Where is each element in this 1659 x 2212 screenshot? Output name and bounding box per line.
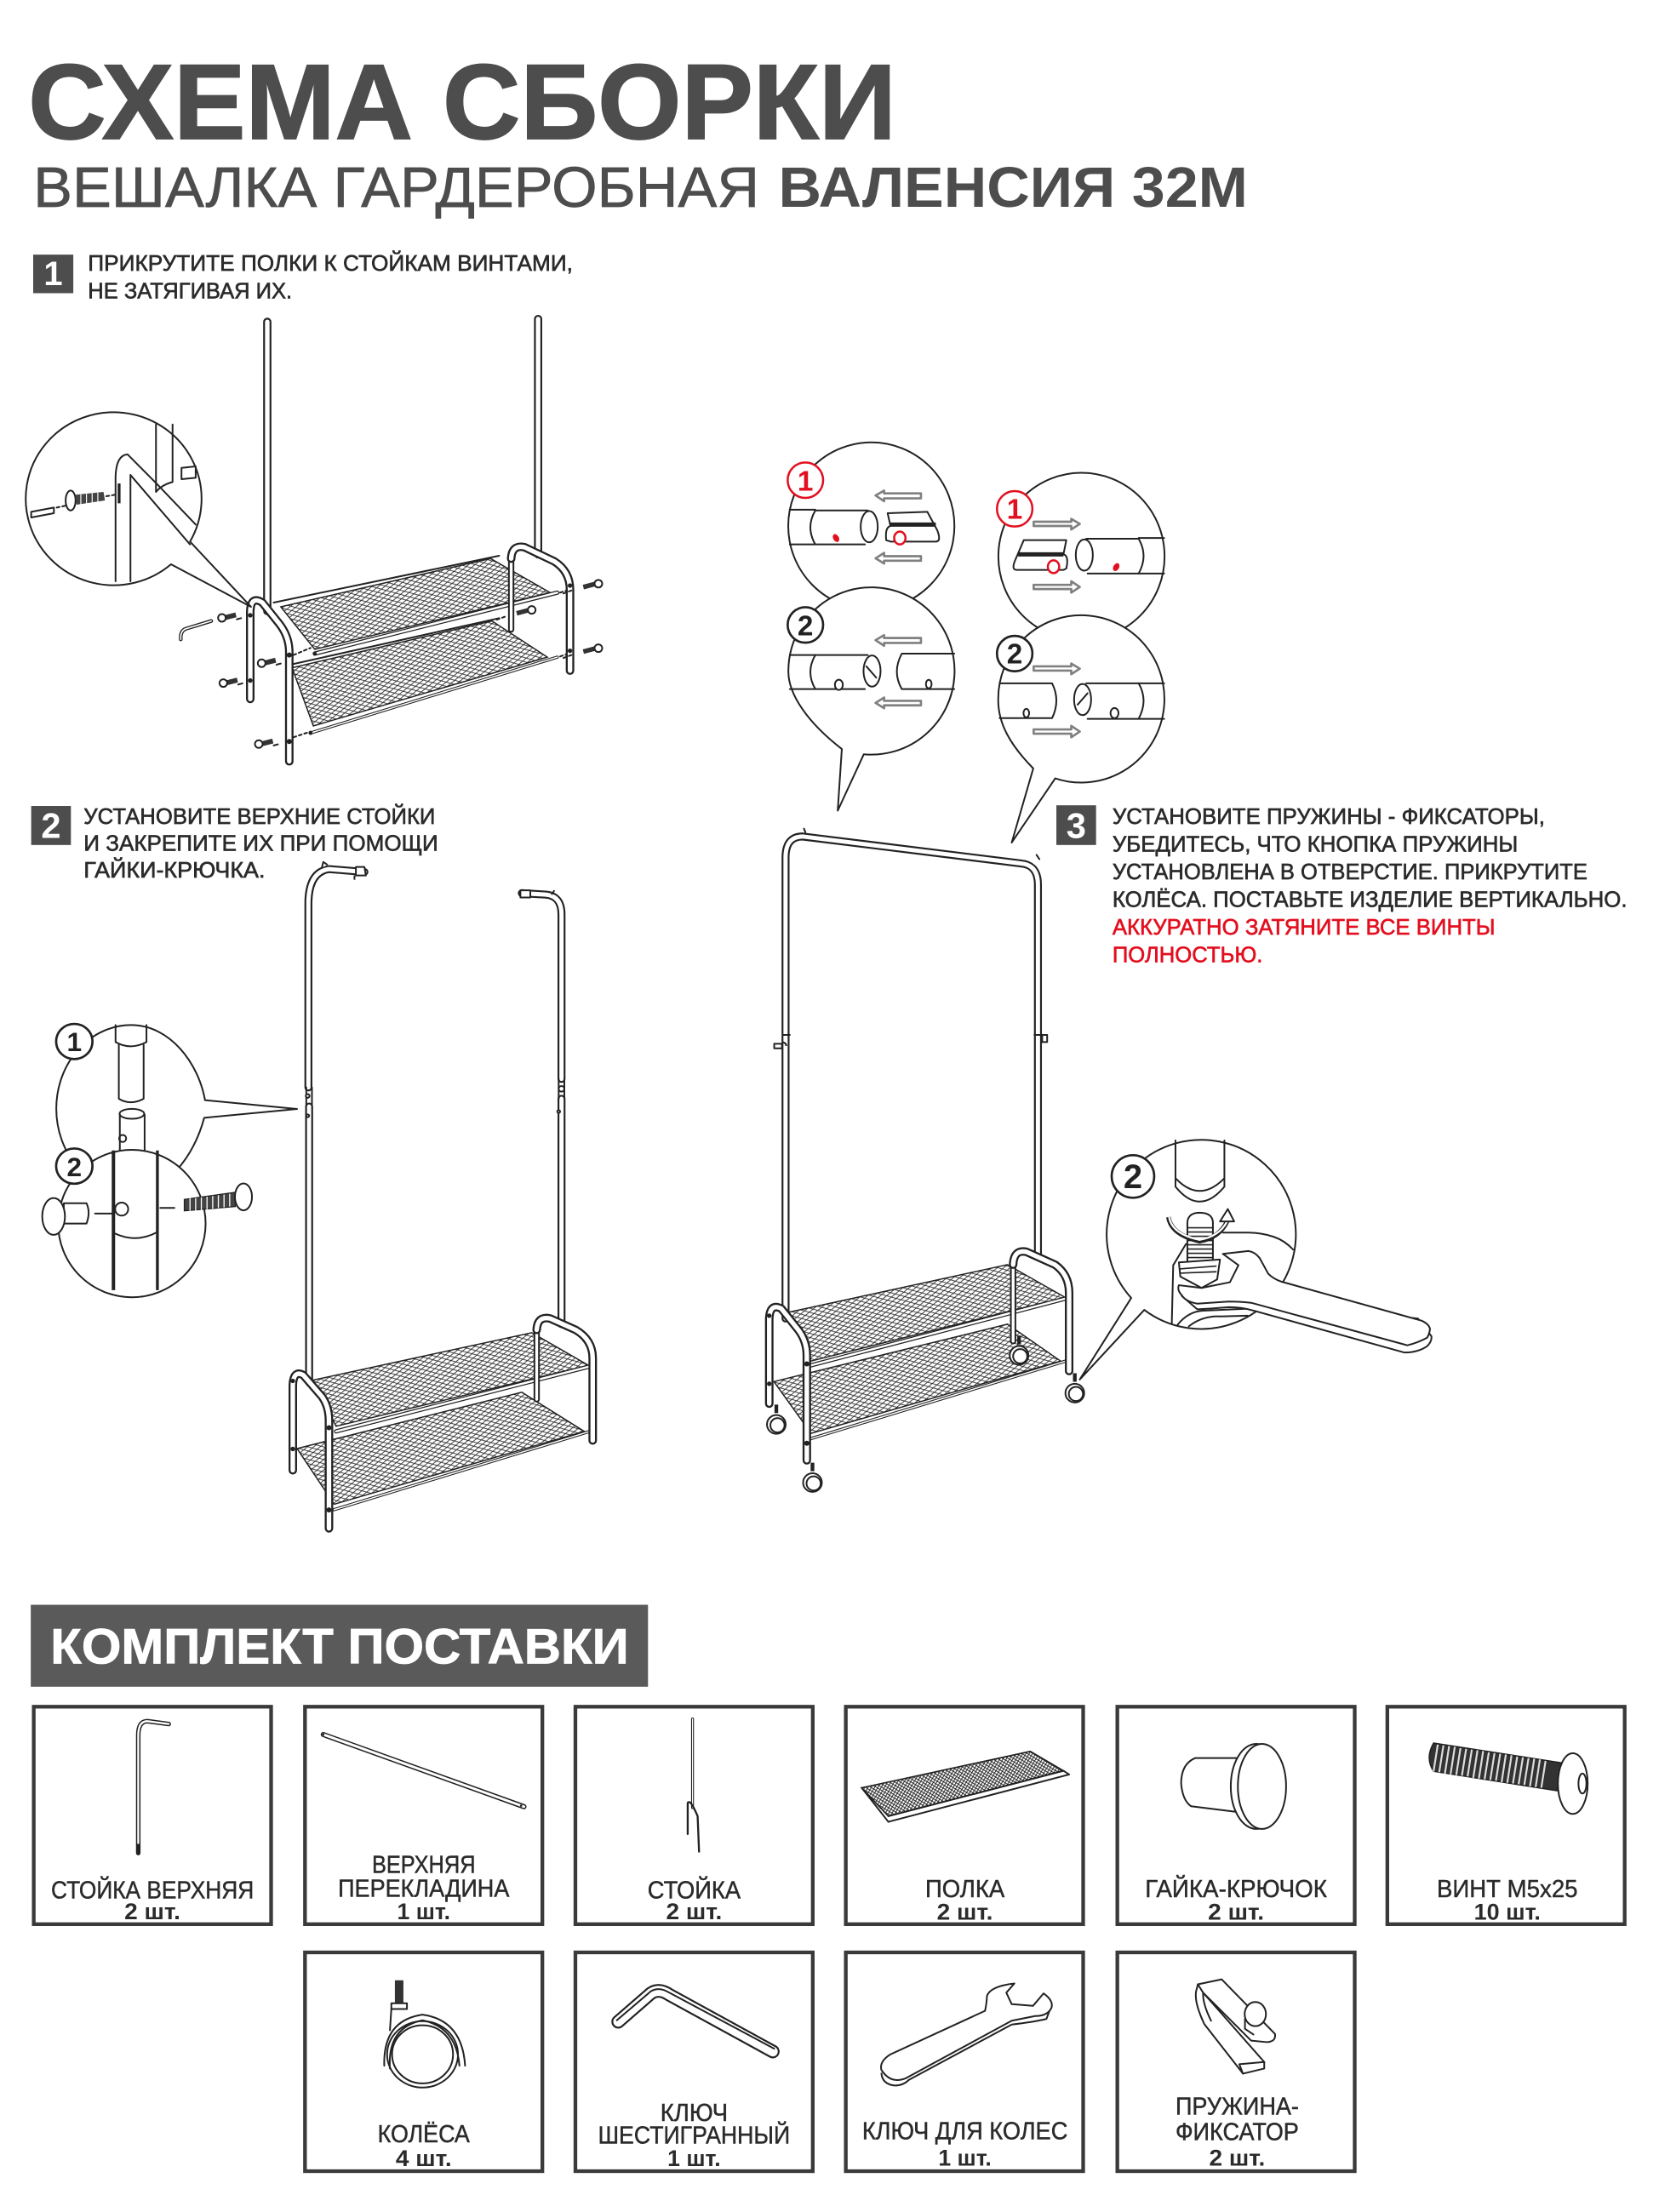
arrows [876,490,921,563]
step 3 heading [1056,805,1628,967]
callout: hook nut and screw detail [43,1150,252,1297]
part: spring clip: ПРУЖИНА- [1176,2093,1299,2120]
callout: right fixed clip detail [998,615,1164,843]
badge: red 1 right: 1 [1007,494,1022,526]
step 2 heading: ГАЙКИ-КРЮЧКА. [83,857,266,883]
badge: black 2 left: 2 [798,610,813,642]
badge: black 2 left [787,607,823,643]
step 2 rack illustration [290,862,594,1529]
callout: upper post joint detail [56,1025,297,1192]
part: upper post [34,1706,272,1924]
step 1 heading: НЕ ЗАТЯГИВАЯ ИХ. [88,280,292,304]
step 1 rack illustration [180,319,602,762]
part: shelf: 2 шт. [937,1900,993,1925]
part: screw M5x25: ВИНТ М5х25 [1437,1875,1578,1902]
part: wheel: КОЛЁСА [378,2120,470,2147]
part: top crossbar: ПЕРЕКЛАДИНА [338,1874,509,1901]
icon: hex key [180,621,211,639]
part: screw M5x25 [1387,1706,1625,1925]
step 2 heading: 2 [41,805,61,845]
badge: detail 1: 1 [66,1026,82,1057]
step 2 heading: УСТАНОВИТЕ ВЕРХНИЕ СТОЙКИ [83,803,435,829]
part: upper post: СТОЙКА ВЕРХНЯЯ [51,1877,254,1904]
step 3 heading: АККУРАТНО ЗАТЯНИТЕ ВСЕ ВИНТЫ [1113,916,1496,940]
step 3 heading: УСТАНОВЛЕНА В ОТВЕРСТИЕ. ПРИКРУТИТЕ [1113,860,1587,884]
part: post: СТОЙКА [648,1877,741,1904]
step 2 heading: И ЗАКРЕПИТЕ ИХ ПРИ ПОМОЩИ [83,832,438,855]
step 3 heading: УБЕДИТЕСЬ, ЧТО КНОПКА ПРУЖИНЫ [1113,832,1518,856]
section header: kit contents: КОМПЛЕКТ ПОСТАВКИ [50,1620,629,1675]
part: wheel [305,1952,542,2171]
part: screw M5x25: 10 шт. [1474,1900,1541,1925]
part: hex key: КЛЮЧ [661,2099,728,2126]
part: post [575,1706,813,1924]
icon: rotation arrow [1169,1209,1234,1241]
step 2 heading [31,803,438,883]
part: upper post: 2 шт. [124,1899,180,1924]
part: post: 2 шт. [666,1899,722,1924]
callout: left spring clip detail [788,443,954,609]
subtitle: ВАЛЕНСИЯ 32М [779,157,1248,220]
badge: detail 2 [56,1148,93,1184]
badge: wrench detail 2 [1112,1155,1154,1197]
part: wheel wrench: КЛЮЧ ДЛЯ КОЛЕС [862,2118,1067,2145]
callout: right spring clip detail [998,473,1164,640]
badge: wrench detail 2: 2 [1124,1158,1142,1196]
callout: step 1 screw detail [26,412,251,607]
badge: red 1 right [997,491,1033,527]
badge: red 1 left [787,462,823,498]
title: СХЕМА СБОРКИ [28,43,896,162]
step 3 heading: 3 [1067,805,1086,845]
subtitle [33,157,1248,220]
step 1 heading: 1 [43,255,63,293]
step 3 heading: УСТАНОВИТЕ ПРУЖИНЫ - ФИКСАТОРЫ, [1113,805,1545,829]
part: hex key: ШЕСТИГРАННЫЙ [598,2122,790,2149]
badge: detail 1 [56,1024,93,1059]
part: spring clip: 2 шт. [1210,2146,1265,2171]
badge: red 1 left: 1 [798,466,813,497]
step 1 heading: ПРИКРУТИТЕ ПОЛКИ К СТОЙКАМ ВИНТАМИ, [88,250,573,276]
badge: black 2 right [997,636,1033,672]
callout: left fixed clip detail [788,587,954,811]
screws [218,580,602,748]
part: spring clip [1118,1952,1355,2171]
part: top crossbar: 1 шт. [398,1899,450,1924]
part: hook nut: ГАЙКА-КРЮЧОК [1145,1875,1327,1902]
step 1 heading [33,250,573,304]
part: wheel: 4 шт. [396,2146,452,2171]
section header: kit contents [31,1605,648,1687]
part: hex key [575,1952,813,2171]
step 3 heading: КОЛЁСА. ПОСТАВЬТЕ ИЗДЕЛИЕ ВЕРТИКАЛЬНО. [1113,888,1628,912]
badge: detail 2: 2 [66,1152,82,1182]
part: wheel wrench: 1 шт. [938,2145,992,2170]
step 3 heading: ПОЛНОСТЬЮ. [1113,943,1262,967]
badge: black 2 right: 2 [1007,639,1022,671]
part: top crossbar: ВЕРХНЯЯ [372,1851,476,1878]
part: top crossbar [305,1706,542,1924]
part: hook nut [1118,1706,1355,1925]
wheels [767,1335,1084,1492]
part: shelf [846,1706,1084,1925]
subtitle: ВЕШАЛКА ГАРДЕРОБНАЯ [33,157,759,220]
step 3 rack illustration [767,829,1084,1492]
part: shelf: ПОЛКА [925,1875,1004,1902]
spring clips [775,1035,1047,1049]
part: hook nut: 2 шт. [1208,1900,1264,1925]
part: hex key: 1 шт. [667,2146,721,2171]
callout: wheel wrench detail [1080,1140,1432,1380]
part: wheel wrench [846,1952,1084,2171]
part: spring clip: ФИКСАТОР [1176,2118,1299,2146]
